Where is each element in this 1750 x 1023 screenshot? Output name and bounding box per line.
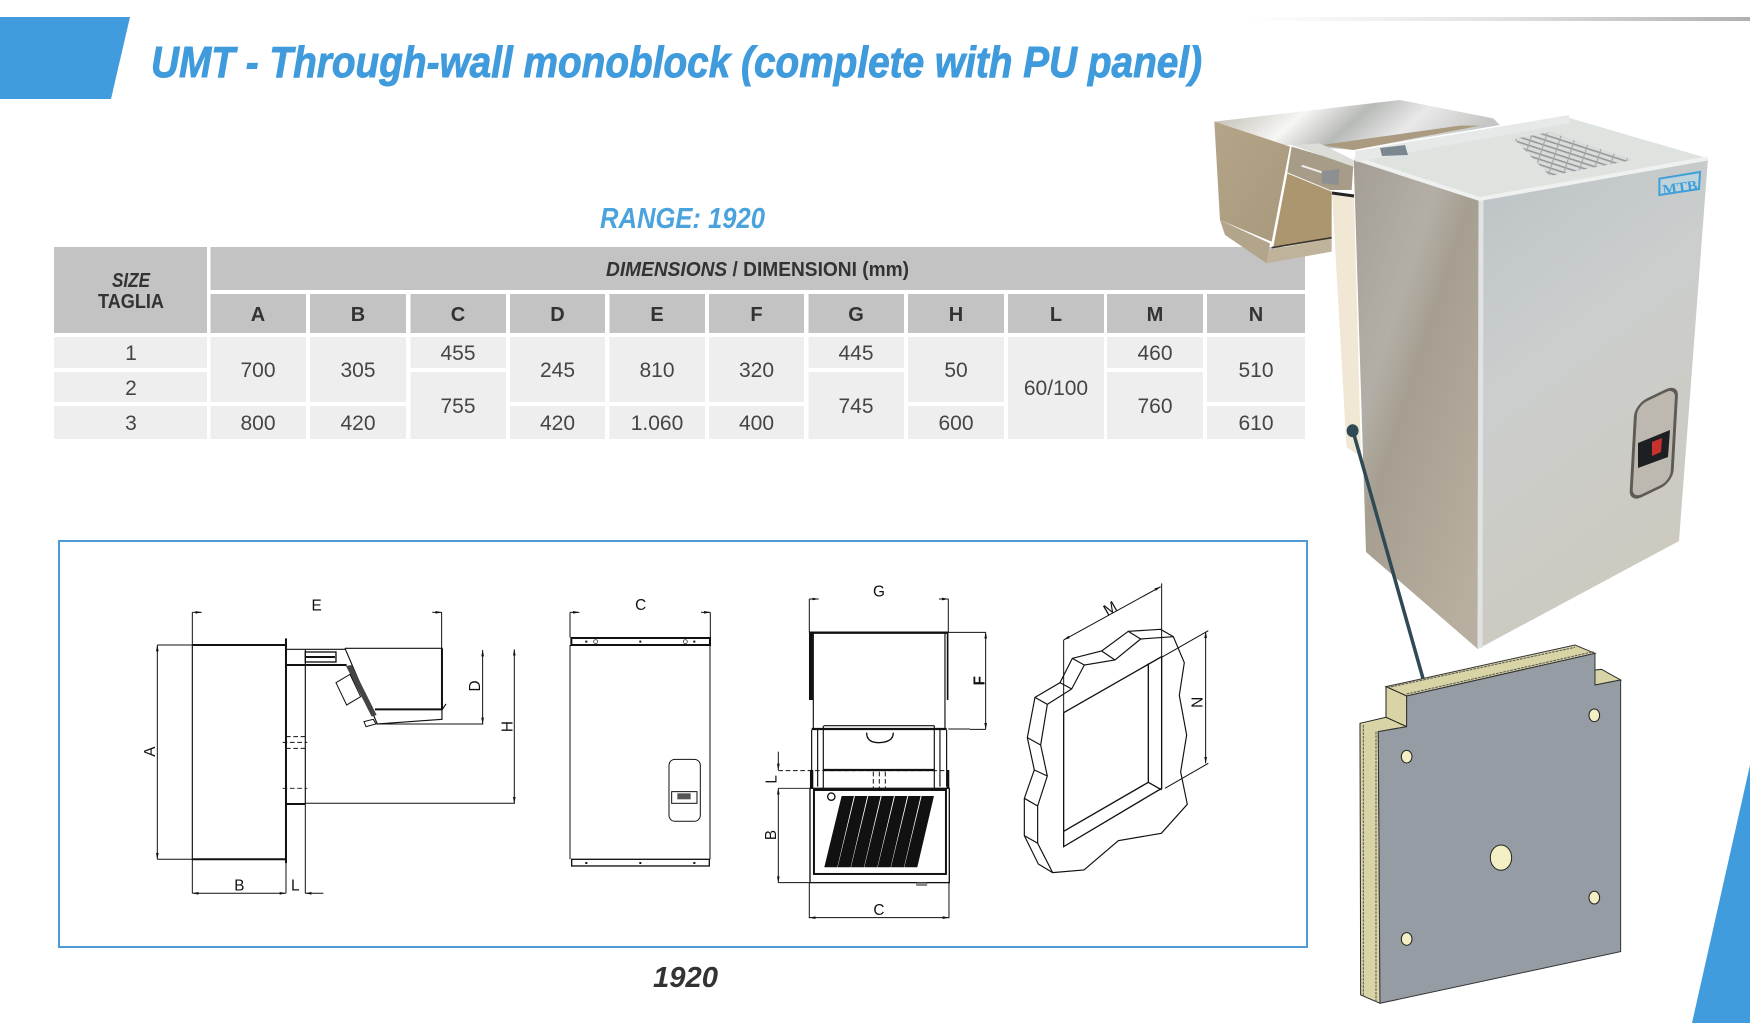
table body values: 760 xyxy=(1137,395,1173,418)
table body values: 455 xyxy=(440,342,476,365)
column letter headers: B xyxy=(351,304,365,326)
table body values: 745 xyxy=(838,395,874,418)
title: UMT - Through-wall monoblock (complete with PU panel) xyxy=(151,38,1202,87)
column letter headers: L xyxy=(1050,304,1062,326)
column letter headers: E xyxy=(650,304,664,326)
label: C: C xyxy=(635,597,646,614)
size column values: 2 xyxy=(125,377,137,400)
table body values: 320 xyxy=(739,359,774,382)
table body values: 1.060 xyxy=(631,412,683,435)
column letter headers: M xyxy=(1147,304,1163,326)
title banner block xyxy=(0,17,130,99)
labels: side view dimensions: L xyxy=(291,878,300,895)
size column values: 1 xyxy=(125,342,137,365)
table body values: 810 xyxy=(639,359,675,382)
size header cell: SIZE xyxy=(112,270,151,292)
insulation plug xyxy=(1332,193,1361,457)
table body values: 610 xyxy=(1238,412,1274,435)
drawing: top view xyxy=(763,584,970,919)
table body values: 50 xyxy=(944,359,968,382)
column letter headers: C xyxy=(451,304,465,326)
drawing: side view xyxy=(142,598,516,895)
labels: side view dimensions xyxy=(142,598,516,895)
controller display xyxy=(1638,430,1670,468)
table body values: 245 xyxy=(540,359,575,382)
labels: wall opening and F dimensions: M xyxy=(1101,598,1120,619)
table body values: 420 xyxy=(340,412,376,435)
labels: side view dimensions: D xyxy=(467,680,484,692)
labels: top view dimensions: C xyxy=(873,902,885,919)
labels: side view dimensions: B xyxy=(234,878,244,895)
column letter headers: D xyxy=(550,304,565,326)
table body values: 510 xyxy=(1238,359,1274,382)
top right grey line xyxy=(1247,17,1750,21)
column letter headers: A xyxy=(251,304,265,326)
dimensions header cell xyxy=(210,247,1305,290)
table body values xyxy=(210,337,1305,439)
figure label: 1920 xyxy=(653,962,718,994)
size header cell: TAGLIA xyxy=(98,291,164,313)
connector line xyxy=(1347,424,1424,682)
controller bezel xyxy=(1631,385,1677,501)
panel left edge xyxy=(1360,717,1407,1003)
panel: technical drawings frame xyxy=(59,541,1307,947)
panel right notch xyxy=(1595,669,1621,685)
grille slats xyxy=(824,796,934,867)
labels: top view dimensions: G xyxy=(873,584,885,601)
table body values: 445 xyxy=(838,342,874,365)
labels: top view dimensions: L xyxy=(764,775,781,784)
table body values: 60/100 xyxy=(1024,377,1088,400)
table body values: 700 xyxy=(240,359,276,382)
column letter headers: G xyxy=(848,304,864,326)
unit top xyxy=(1354,115,1708,199)
labels: wall opening and F dimensions: N xyxy=(1189,697,1206,708)
labels: side view dimensions: A xyxy=(142,746,159,757)
dimensions header cell: DIMENSIONS / DIMENSIONI (mm) xyxy=(606,259,909,281)
photo: PU panel xyxy=(1360,645,1621,1003)
panel face xyxy=(1378,653,1621,1003)
column letter headers: N xyxy=(1249,304,1263,326)
table body values: 600 xyxy=(938,412,974,435)
column letter headers: F xyxy=(750,304,763,326)
corner triangle xyxy=(1692,765,1750,1023)
unit front face xyxy=(1478,158,1708,649)
drawing: wall opening xyxy=(970,583,1208,873)
table body values: 305 xyxy=(340,359,376,382)
unit left face xyxy=(1354,160,1480,649)
range heading: RANGE: 1920 xyxy=(600,203,765,235)
dimensions table xyxy=(54,247,1305,439)
panel holes xyxy=(1401,709,1600,945)
size column values: 3 xyxy=(125,412,137,435)
column letter headers: H xyxy=(949,304,963,326)
labels: top view dimensions: B xyxy=(763,830,780,840)
size header cell xyxy=(54,247,207,333)
labels: wall opening and F dimensions: F xyxy=(972,676,989,685)
labels: side view dimensions: E xyxy=(312,598,322,615)
panel step xyxy=(1386,687,1407,727)
table body values: 800 xyxy=(240,412,276,435)
panel top edge xyxy=(1386,645,1595,696)
logo: MTB: MTB xyxy=(1662,179,1698,198)
photo: condenser hood of monoblock xyxy=(1214,100,1500,263)
size column values xyxy=(54,337,207,439)
column letter headers xyxy=(210,294,1305,333)
labels: top view dimensions xyxy=(763,584,885,919)
labels: wall opening and F dimensions xyxy=(972,598,1206,708)
logo: MTB xyxy=(1659,172,1700,198)
table body values: 420 xyxy=(540,412,575,435)
drawing: front view xyxy=(570,597,710,866)
photo: monoblock unit xyxy=(1332,115,1708,682)
table body values: 400 xyxy=(739,412,774,435)
table body values: 460 xyxy=(1137,342,1173,365)
labels: side view dimensions: H xyxy=(499,721,516,732)
table body values: 755 xyxy=(440,395,476,418)
